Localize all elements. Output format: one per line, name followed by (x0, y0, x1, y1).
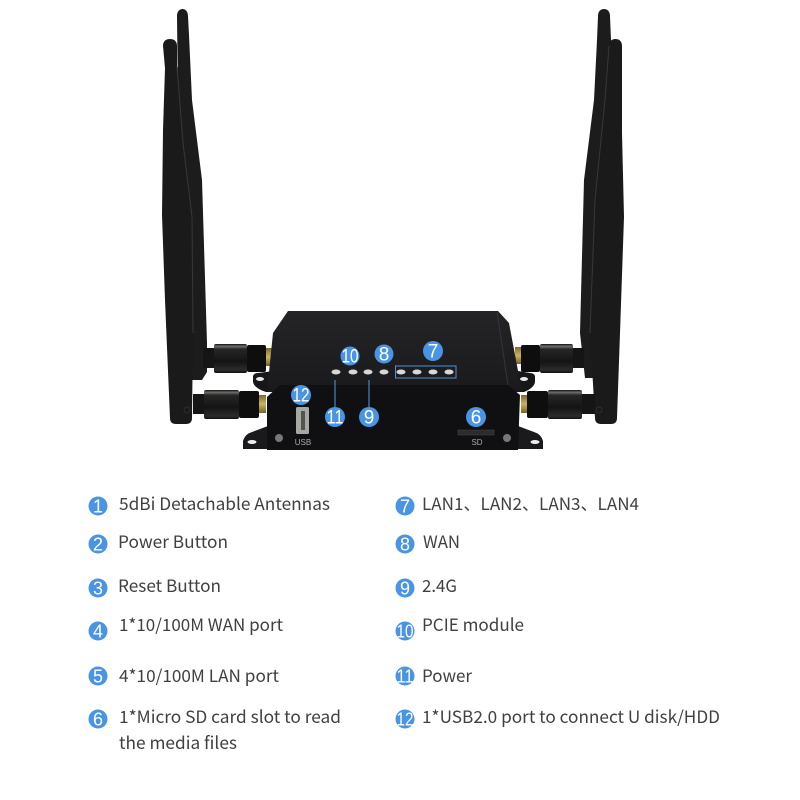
list: left column: 1 (93, 496, 103, 516)
list: left column: 2 (93, 534, 103, 554)
list: right column (396, 490, 720, 730)
USB label: USB (295, 438, 311, 447)
LED indicators (332, 370, 454, 374)
list: right column: Power (422, 662, 472, 687)
connectors: left (193, 344, 272, 419)
antennas: right pair (580, 9, 624, 424)
callout badges on router (291, 341, 486, 428)
list: left column: Power Button (118, 528, 228, 553)
top face (267, 311, 522, 392)
SD label: SD (471, 438, 483, 447)
list: right column: 1*USB2.0 port to connect U disk/HDD (422, 703, 720, 728)
callout badges on router: 8 (379, 344, 389, 366)
list: right column: WAN (423, 528, 460, 553)
list: right column: LAN1、LAN2、LAN3、LAN4 (422, 490, 639, 515)
list: right column: 7 (400, 496, 410, 516)
USB port (296, 407, 309, 434)
list: left column: 5dBi Detachable Antennas (119, 490, 330, 515)
screws (275, 434, 283, 442)
callout badges on router: 11 (326, 408, 344, 428)
callout badges on router: 10 (342, 346, 358, 368)
list: left column: 1*10/100M WAN port (119, 611, 284, 636)
list: left column: 6 (93, 710, 103, 730)
connectors: right (515, 344, 595, 419)
list: right column: 8 (400, 534, 410, 554)
list: left column: 5 (93, 666, 103, 686)
list: left column (88, 490, 341, 754)
SD slot (458, 430, 494, 435)
list: left column: 4 (93, 622, 103, 642)
callout badges on router: 12 (292, 386, 310, 406)
list: left column: the media files (119, 729, 237, 754)
callout badges on router: 7 (428, 342, 438, 362)
callout badges on router: 6 (471, 408, 481, 428)
callout badges on router: 9 (364, 408, 374, 428)
list: right column: 11 (396, 666, 414, 686)
leader lines (335, 380, 369, 410)
list: left column: Reset Button (118, 572, 221, 597)
antennas: left pair (162, 9, 207, 424)
list: left column: 4*10/100M LAN port (119, 662, 280, 687)
list: right column: 9 (400, 578, 410, 598)
list: left column: 1*Micro SD card slot to read (119, 703, 341, 728)
list: right column: 10 (396, 622, 414, 642)
router body (243, 311, 543, 450)
front face (267, 385, 520, 450)
list: right column: PCIE module (422, 611, 524, 636)
list: left column: 3 (93, 578, 103, 598)
mounting feet (243, 426, 543, 449)
list: right column: 2.4G (422, 572, 457, 597)
LAN highlight box (396, 366, 456, 378)
upper mounting ears (253, 371, 535, 392)
list: right column: 12 (396, 710, 414, 730)
